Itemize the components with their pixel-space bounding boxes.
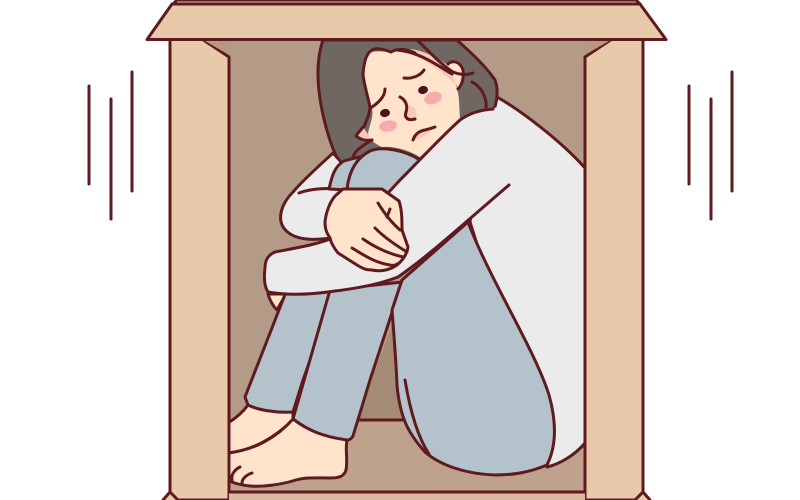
rear leg	[245, 290, 335, 412]
motion lines: left	[89, 72, 132, 219]
right cheek	[423, 90, 443, 106]
right eyebrow	[404, 70, 424, 78]
small visible toe under arm	[268, 294, 286, 310]
face	[353, 40, 486, 160]
rear knee	[329, 157, 360, 190]
box: inner corner shadows	[205, 41, 609, 55]
mouth	[414, 127, 435, 140]
thigh	[392, 222, 554, 475]
front foot	[228, 419, 347, 486]
left eyebrow	[372, 89, 385, 107]
front sleeve	[264, 105, 530, 294]
front leg	[293, 282, 402, 441]
motion lines: right	[689, 72, 732, 219]
left cheek	[378, 119, 398, 133]
left eye	[379, 108, 391, 118]
right eye	[417, 85, 429, 95]
rear foot	[228, 405, 293, 453]
shirt: torso	[470, 97, 585, 467]
front knee	[347, 149, 420, 194]
box: left post	[163, 39, 229, 500]
nose shadow	[403, 104, 419, 122]
box interior	[200, 40, 610, 492]
box: bottom flap	[229, 492, 585, 500]
nose	[400, 97, 415, 120]
hand	[325, 189, 408, 271]
rear sleeve	[281, 153, 345, 239]
box: top flap	[147, 0, 666, 40]
hair strands	[417, 40, 473, 74]
box: right post	[585, 39, 650, 500]
right ear	[448, 62, 463, 89]
hair	[318, 40, 497, 168]
